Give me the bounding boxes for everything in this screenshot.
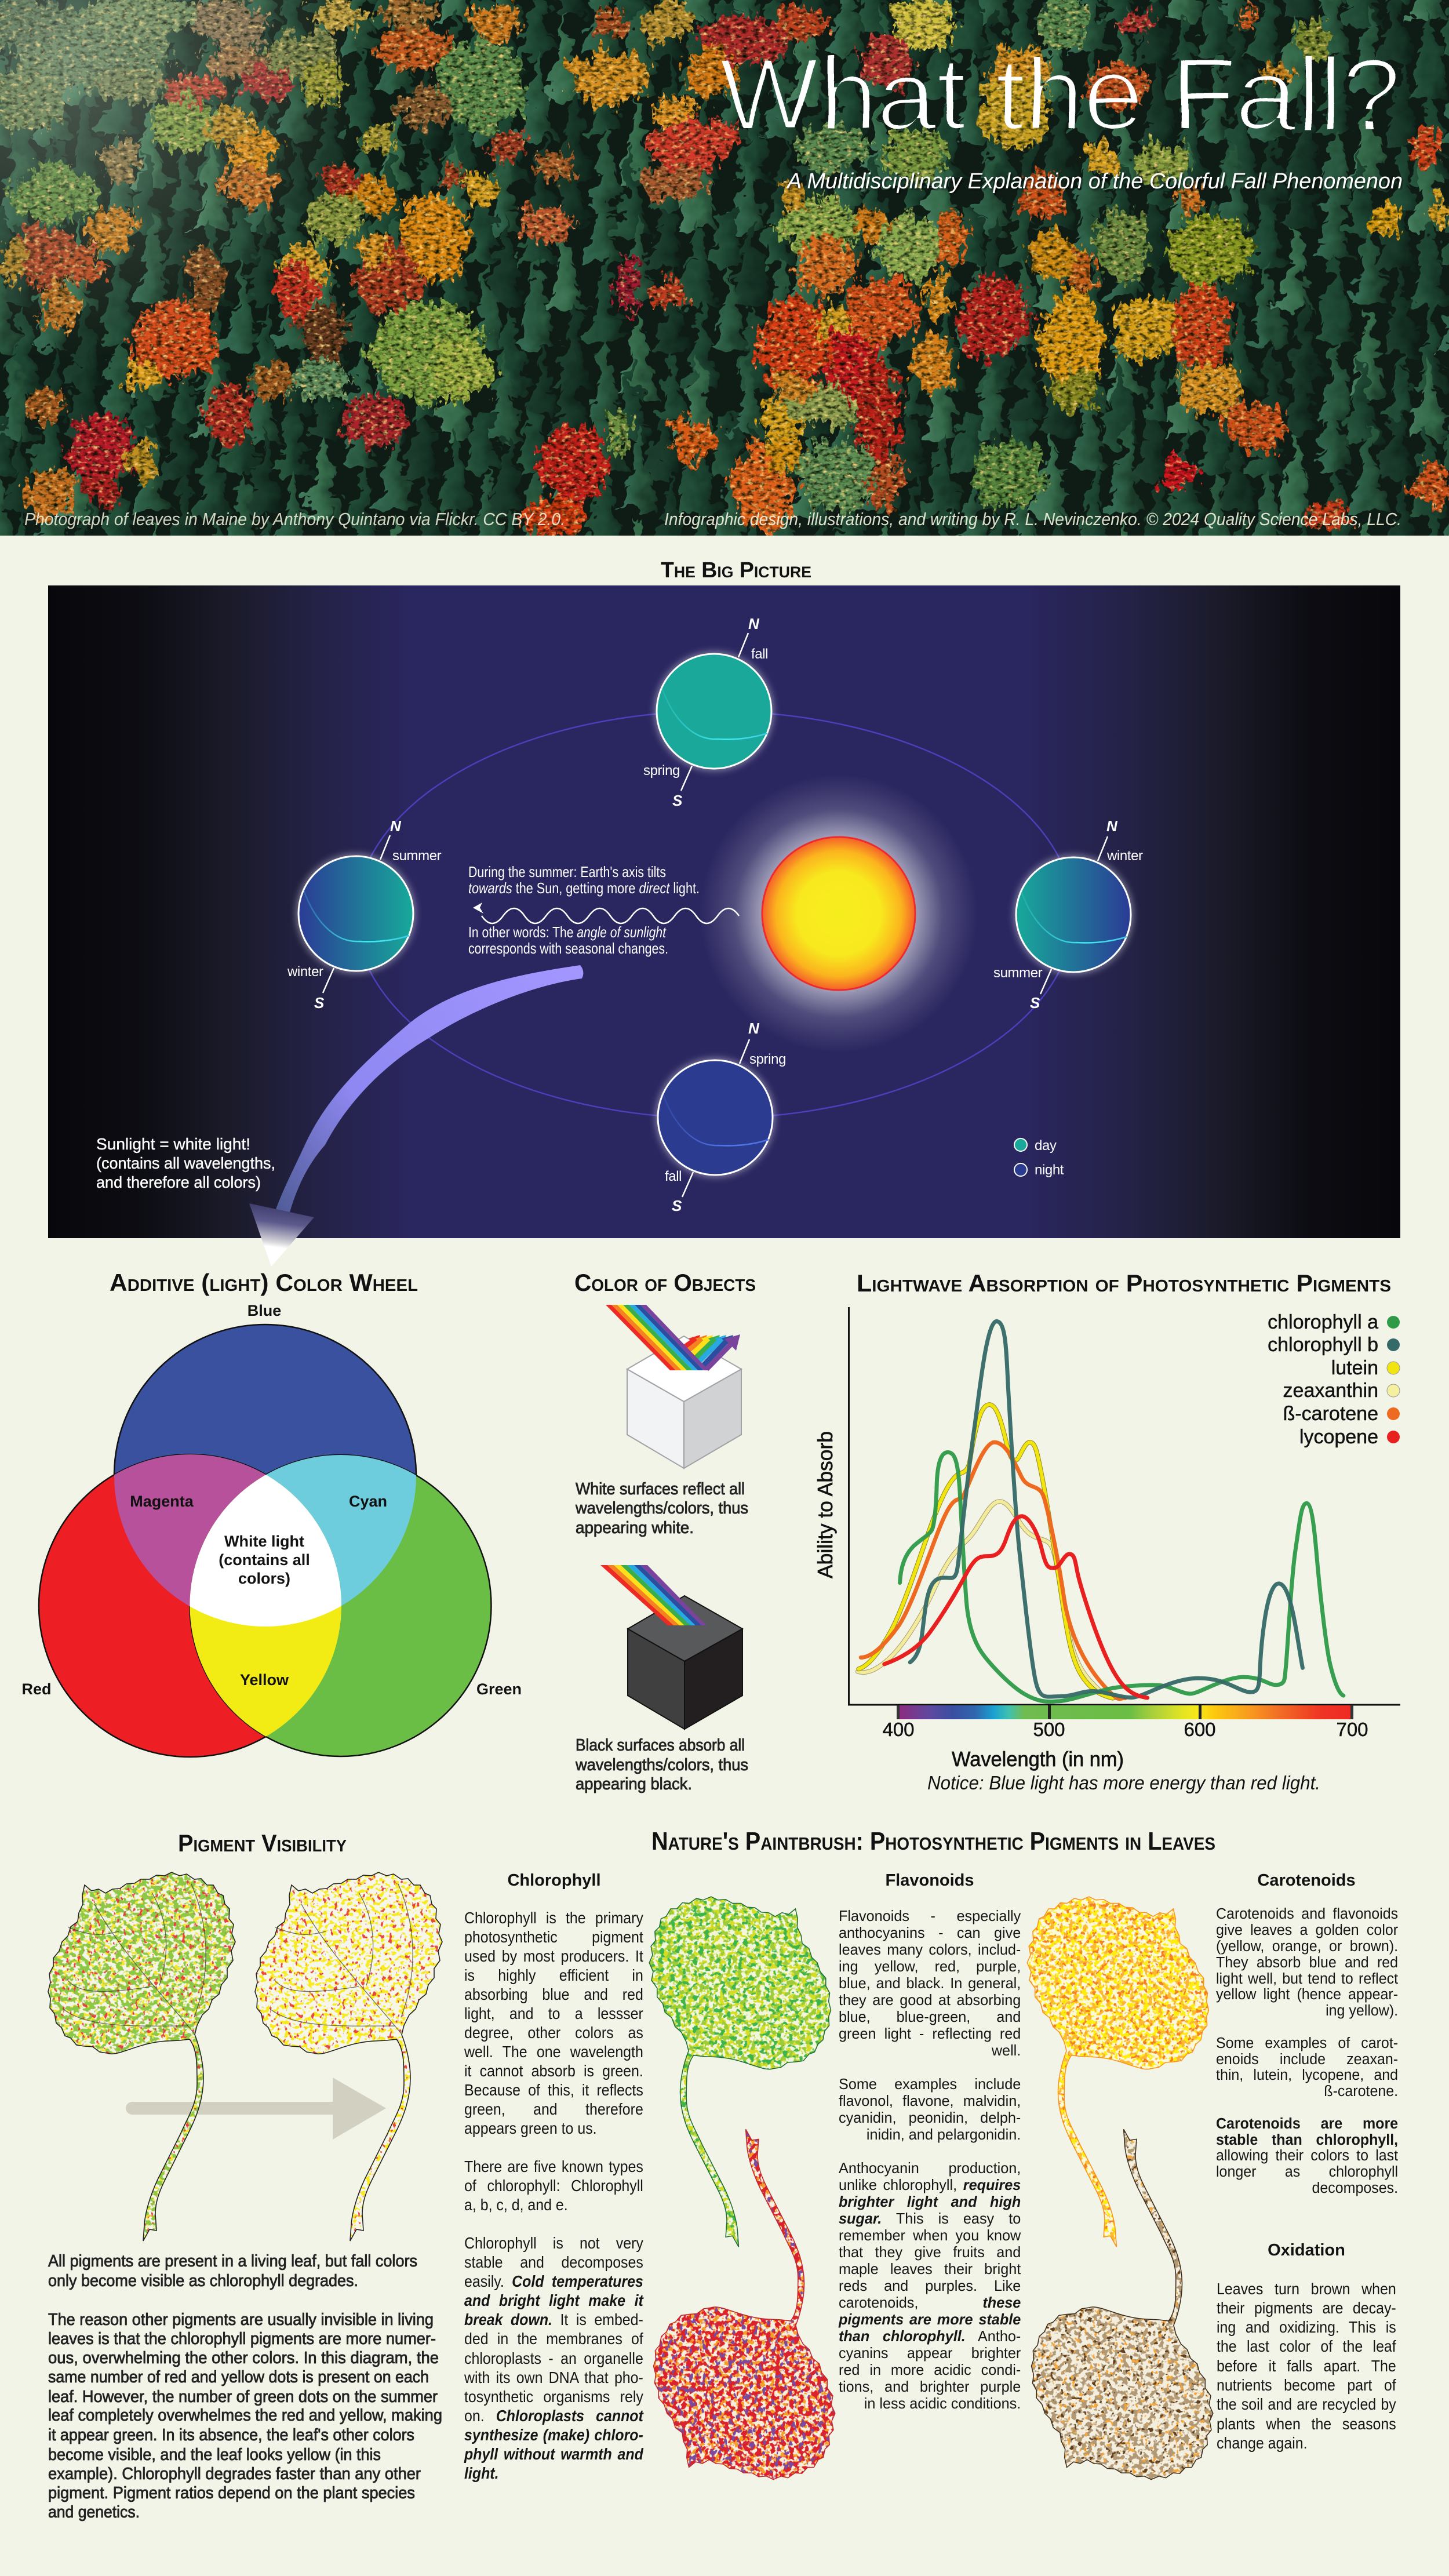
sun	[700, 774, 978, 1053]
text: oxidation column: before it falls apart. The	[1217, 2357, 1396, 2375]
text: chlorophyll column: Because of this, it reflects	[464, 2081, 643, 2099]
text: carotenoids column: ing yellow).	[1326, 2003, 1398, 2019]
heading: nature's paintbrush: Nature's Paintbrush: Photosynthetic Pigments in Leaves	[651, 1827, 1215, 1855]
text: axis tilt explanation: During the summer: Earth's axis tilts	[468, 863, 666, 881]
text: sunlight is white light	[96, 1135, 275, 1191]
text: flavonoids column: inidin, and pelargonidin.	[866, 2125, 1021, 2142]
absorption curves	[858, 1322, 1344, 1702]
chart legend: lycopene	[1299, 1426, 1378, 1448]
text: white surfaces	[575, 1480, 748, 1537]
text: chlorophyll column: synthesize (make) chloro-	[464, 2426, 643, 2444]
additive color wheel venn diagram: Blue	[247, 1302, 281, 1319]
text: carotenoids column: thin, lutein, lycopene, and	[1216, 2067, 1398, 2083]
axis numbers	[882, 1719, 1368, 1740]
chart legend: chlorophyll b	[1268, 1334, 1378, 1356]
text: chlorophyll column: absorbing blue and red	[464, 1985, 643, 2003]
text: carotenoids column: (yellow, orange, or brown).	[1216, 1938, 1398, 1955]
additive color wheel venn diagram: colors)	[238, 1570, 290, 1587]
text: carotenoids column: give leaves a golden color	[1216, 1922, 1398, 1938]
text: flavonoids column: green light - reflecting red	[838, 2024, 1021, 2042]
text: carotenoids column: ß-carotene.	[1324, 2083, 1398, 2100]
earth: left of orbit: N	[390, 817, 402, 835]
text: pigment visibility explanation: ous, overwhelming the other colors. In this diagram, the	[48, 2349, 439, 2367]
text: flavonoids column: reds and purples. Like	[838, 2277, 1021, 2294]
earth: top of orbit: fall	[751, 646, 768, 662]
legend: day and night	[1014, 1138, 1064, 1178]
text: flavonoids column: Flavonoids - especially	[838, 1907, 1021, 1924]
legend: day and night: day	[1035, 1138, 1057, 1154]
additive color wheel venn diagram: Yellow	[240, 1671, 289, 1689]
chart legend: lutein	[1331, 1357, 1378, 1379]
text: chlorophyll column: well. The one wavelength	[464, 2043, 643, 2061]
text: flavonoids column: maple leaves their bright	[838, 2260, 1021, 2277]
text: flavonoids column: they are good at absorbing	[838, 1991, 1021, 2008]
text: sunlight is white light: and therefore all colors)	[96, 1173, 261, 1191]
text: flavonoids column: Anthocyanin production,	[838, 2159, 1021, 2176]
arrow: summer leaf to fall leaf	[126, 2077, 386, 2140]
text: sunlight is white light: Sunlight = white light!	[96, 1135, 250, 1153]
text: chlorophyll column: easily. Cold temperatures	[464, 2272, 643, 2290]
text: chlorophyll column: There are five known types	[464, 2157, 643, 2175]
text: chlorophyll column: green, and therefore	[464, 2100, 643, 2118]
chart legend: zeaxanthin	[1283, 1380, 1378, 1402]
text: flavonoids column: than chlorophyll. Antho-	[838, 2327, 1021, 2344]
text: chlorophyll column: with its own DNA that pho-	[464, 2368, 643, 2386]
earth: right of orbit	[993, 817, 1143, 1012]
hero photograph: aerial autumn forest	[0, 0, 1449, 570]
text: pigment visibility explanation: leaf. However, the number of green dots on the summer	[48, 2388, 438, 2406]
text: pigment visibility explanation: leaves is that the chlorophyll pigments are more numer-	[48, 2330, 436, 2348]
text: carotenoids column: light well, but tend to reflect	[1216, 1971, 1398, 1987]
text: chlorophyll column: break down. It is embed-	[464, 2311, 643, 2328]
text: flavonoids column: tions, and brighter purple	[838, 2378, 1021, 2395]
x axis label: Wavelength (in nm)	[952, 1747, 1124, 1771]
text: flavonoids column: remember when you know	[838, 2226, 1021, 2243]
text: axis tilt explanation: corresponds with seasonal changes.	[468, 940, 668, 957]
text: oxidation column: Leaves turn brown when	[1217, 2280, 1396, 2298]
text: sunlight is white light: (contains all wavelengths,	[96, 1154, 275, 1172]
text: black surfaces: appearing black.	[576, 1775, 692, 1793]
text: oxidation column	[1217, 2280, 1396, 2452]
text: black surfaces: wavelengths/colors, thus	[575, 1756, 748, 1774]
text: pigment visibility explanation: leaf completely overwhelmes the red and yellow, making	[48, 2406, 442, 2425]
chart legend: ß-carotene	[1283, 1403, 1378, 1425]
text: flavonoids column: sugar. This is easy to	[838, 2210, 1021, 2227]
wavy sunlight arrow	[473, 903, 739, 923]
curved arrow: sunlight into the diagram below	[249, 965, 583, 1267]
additive color wheel venn diagram: White light	[224, 1533, 304, 1550]
text: chlorophyll column: light.	[464, 2464, 499, 2482]
text: flavonoids column: in less acidic conditions.	[864, 2394, 1021, 2411]
text: flavonoids column: Some examples include	[838, 2075, 1021, 2093]
earth: bottom of orbit: S	[672, 1197, 682, 1214]
earth: bottom of orbit: N	[748, 1020, 760, 1037]
chart: lightwave absorption of pigments	[813, 1307, 1400, 1793]
text: chlorophyll column: used by most producers. It	[464, 1947, 643, 1965]
text: chlorophyll column: light, and to a lessser	[464, 2004, 643, 2022]
visible spectrum bar	[897, 1705, 1353, 1719]
text: oxidation column: nutrients become part of	[1217, 2376, 1396, 2394]
text: chlorophyll column: phyll without warmth and	[464, 2445, 643, 2463]
text: pigment visibility explanation: All pigments are present in a living leaf, but fall colors	[48, 2252, 417, 2271]
leaf: chlorophyll green	[649, 1897, 831, 2247]
white cube reflecting rainbow	[606, 1305, 741, 1468]
design credit: Infographic design, illustrations, and writing by R. L. Nevinczenko. © 2024 Quality Science Labs, LLC.	[664, 509, 1401, 529]
text: carotenoids column: decomposes.	[1312, 2180, 1398, 2196]
text: chlorophyll column: a, b, c, d, and e.	[464, 2196, 568, 2214]
heading: pigment visibility: Pigment Visibility	[178, 1829, 347, 1857]
text: chlorophyll column: tosynthetic organisms rely	[464, 2388, 643, 2406]
text: oxidation column: ing and oxidizing. This is	[1217, 2318, 1396, 2336]
earth: top of orbit: spring	[643, 763, 680, 778]
chart axes	[849, 1307, 1400, 1705]
heading: additive color wheel: Additive (light) Color Wheel	[110, 1269, 418, 1296]
text: chlorophyll column: stable and decomposes	[464, 2253, 643, 2271]
text: carotenoids column: longer as chlorophyll	[1216, 2164, 1398, 2180]
axis numbers: 400	[882, 1719, 915, 1740]
heading: the big picture: The Big Picture	[661, 558, 811, 583]
axis numbers: 700	[1336, 1719, 1368, 1740]
photo credit: Photograph of leaves in Maine by Anthony Quintano via Flickr. CC BY 2.0.	[24, 509, 565, 529]
text: carotenoids column: enoids include zeaxan-	[1216, 2051, 1398, 2068]
text: chlorophyll column	[464, 1909, 644, 2482]
text: black surfaces: Black surfaces absorb all	[576, 1736, 745, 1755]
text: pigment visibility explanation: become visible, and the leaf looks yellow (in this	[48, 2446, 381, 2464]
text: chlorophyll column: on. Chloroplasts cannot	[464, 2407, 643, 2425]
leaf: carotenoid yellow and orange	[1027, 1897, 1208, 2247]
text: white surfaces: White surfaces reflect all	[576, 1480, 745, 1498]
earth: bottom of orbit: fall	[665, 1169, 682, 1184]
text: chlorophyll column: ded in the membranes of	[464, 2330, 643, 2348]
text: chlorophyll column: of chlorophyll: Chlorophyll	[464, 2177, 643, 2195]
text: axis tilt explanation: In other words: The angle of sunlight	[468, 923, 667, 941]
text: carotenoids column: They absorb blue and red	[1216, 1955, 1398, 1971]
text: carotenoids column: Carotenoids are more	[1216, 2116, 1398, 2132]
text: flavonoids column: anthocyanins - can give	[838, 1923, 1021, 1941]
additive color wheel venn diagram: Magenta	[130, 1493, 194, 1510]
earth: right of orbit: N	[1106, 817, 1118, 835]
text: pigment visibility explanation: pigment. Pigment ratios depend on the plant species	[48, 2484, 415, 2502]
chart legend: chlorophyll a	[1268, 1311, 1378, 1333]
text: flavonoids column: pigments are more stable	[838, 2311, 1021, 2328]
text: carotenoids column: allowing their colors to last	[1216, 2148, 1398, 2164]
text: chlorophyll column: chloroplasts - an organelle	[464, 2349, 643, 2367]
earth: left of orbit: winter	[287, 964, 323, 980]
leaf: summer with chlorophyll	[48, 1872, 235, 2241]
text: black surfaces	[575, 1736, 748, 1793]
text: chlorophyll column: appears green to us.	[464, 2119, 597, 2137]
leaf: flavonoid red and purple	[654, 2129, 835, 2480]
text: flavonoids column: flavonol, flavone, malvidin,	[838, 2091, 1021, 2109]
text: carotenoids column: yellow light (hence appear-	[1216, 1986, 1398, 2003]
text: chlorophyll column: is highly efficient in	[464, 1966, 643, 1984]
title: What the Fall?	[719, 37, 1401, 152]
text: pigment visibility explanation: only become visible as chlorophyll degrades.	[48, 2272, 358, 2290]
text: flavonoids column: red in more acidic condi-	[838, 2360, 1021, 2378]
text: flavonoids column: brighter light and high	[838, 2192, 1021, 2210]
text: flavonoids column: that they give fruits and	[838, 2243, 1021, 2261]
heading: carotenoids: Carotenoids	[1257, 1871, 1356, 1890]
text: oxidation column: their pigments are decay-	[1217, 2299, 1396, 2317]
text: chlorophyll column: and bright light make it	[464, 2291, 643, 2309]
panel: seasons and earth's orbit	[48, 585, 1400, 1267]
text: carotenoids column: Some examples of carot-	[1216, 2035, 1398, 2051]
earth: top of orbit: S	[672, 792, 683, 809]
text: pigment visibility explanation	[48, 2252, 442, 2522]
earth: right of orbit: S	[1030, 994, 1040, 1012]
text: axis tilt explanation	[468, 863, 700, 957]
heading: lightwave absorption: Lightwave Absorption of Photosynthetic Pigments	[857, 1269, 1391, 1297]
subtitle: A Multidisciplinary Explanation of the Colorful Fall Phenomenon	[786, 169, 1403, 194]
axis numbers: 500	[1033, 1719, 1065, 1740]
earth: left of orbit: summer	[392, 848, 442, 864]
text: flavonoids column: ing yellow, red, purple,	[838, 1957, 1021, 1974]
text: carotenoids column: Carotenoids and flavonoids	[1216, 1906, 1398, 1922]
additive color wheel venn diagram: Green	[476, 1680, 522, 1698]
earth: bottom of orbit: spring	[749, 1051, 786, 1067]
earth: left of orbit: S	[314, 994, 325, 1012]
chart note: Notice: Blue light has more energy than red light.	[927, 1772, 1320, 1793]
text: pigment visibility explanation: it appear green. In its absence, the leaf's other colors	[48, 2426, 414, 2444]
additive color wheel venn diagram: (contains all	[219, 1551, 310, 1569]
text: white surfaces: appearing white.	[576, 1519, 694, 1537]
text: pigment visibility explanation: example). Chlorophyll degrades faster than any other	[48, 2465, 421, 2483]
earth: right of orbit: winter	[1106, 848, 1143, 864]
orbit ring	[356, 711, 1073, 1118]
text: flavonoids column	[838, 1907, 1021, 2411]
leaf: oxidized brown	[1032, 2129, 1213, 2480]
text: oxidation column: plants when the seasons	[1217, 2415, 1396, 2433]
earth: right of orbit: summer	[993, 965, 1043, 981]
additive color wheel venn diagram	[21, 1302, 522, 1757]
text: axis tilt explanation: towards the Sun, getting more direct light.	[468, 879, 700, 897]
text: flavonoids column: blue, blue-green, and	[838, 2008, 1021, 2025]
heading: chlorophyll: Chlorophyll	[507, 1871, 601, 1890]
earth: left of orbit	[287, 817, 442, 1012]
text: pigment visibility explanation: and genetics.	[48, 2503, 140, 2522]
text: oxidation column: change again.	[1217, 2434, 1308, 2452]
text: flavonoids column: cyanidin, peonidin, delph-	[838, 2109, 1021, 2126]
text: chlorophyll column: Chlorophyll is not very	[464, 2234, 643, 2252]
text: oxidation column: the last color of the leaf	[1217, 2337, 1396, 2355]
earth: top of orbit	[643, 615, 774, 809]
text: flavonoids column: leaves many colors, includ-	[838, 1941, 1021, 1958]
text: flavonoids column: unlike chlorophyll, requires	[838, 2176, 1021, 2193]
earth: bottom of orbit	[656, 1020, 786, 1214]
additive color wheel venn diagram: Cyan	[349, 1493, 387, 1510]
y axis label: Ability to Absorb	[813, 1431, 837, 1578]
text: pigment visibility explanation: same number of red and yellow dots is present on each	[48, 2368, 429, 2386]
text: carotenoids column: stable than chlorophyll,	[1216, 2132, 1398, 2148]
text: flavonoids column: well.	[991, 2042, 1021, 2059]
text: chlorophyll column: degree, other colors as	[464, 2024, 643, 2042]
text: pigment visibility explanation: The reason other pigments are usually invisible in living	[48, 2311, 434, 2329]
heading: oxidation: Oxidation	[1268, 2241, 1345, 2260]
text: carotenoids column	[1216, 1906, 1398, 2196]
text: white surfaces: wavelengths/colors, thus	[575, 1499, 748, 1518]
text: flavonoids column: carotenoids, these	[838, 2293, 1021, 2311]
axis numbers: 600	[1184, 1719, 1216, 1740]
text: chlorophyll column: it cannot absorb is green.	[464, 2062, 643, 2080]
black cube absorbing rainbow	[600, 1565, 742, 1729]
chart legend	[1268, 1311, 1400, 1448]
text: chlorophyll column: photosynthetic pigment	[464, 1928, 643, 1946]
panel background	[48, 585, 1400, 1238]
text: chlorophyll column: Chlorophyll is the primary	[464, 1909, 643, 1927]
text: oxidation column: the soil and are recycled by	[1217, 2395, 1396, 2413]
text: flavonoids column: blue, and black. In general,	[838, 1974, 1021, 1992]
earth: top of orbit: N	[748, 615, 760, 632]
heading: flavonoids: Flavonoids	[885, 1871, 974, 1890]
heading: color of objects: Color of Objects	[574, 1269, 756, 1296]
legend: day and night: night	[1035, 1162, 1064, 1178]
morning mist in the upper left of the photo	[0, 0, 333, 322]
additive color wheel venn diagram: Red	[21, 1680, 52, 1698]
leaf: fall with degraded chlorophyll	[255, 1872, 442, 2241]
text: flavonoids column: cyanins appear brighter	[838, 2344, 1021, 2362]
